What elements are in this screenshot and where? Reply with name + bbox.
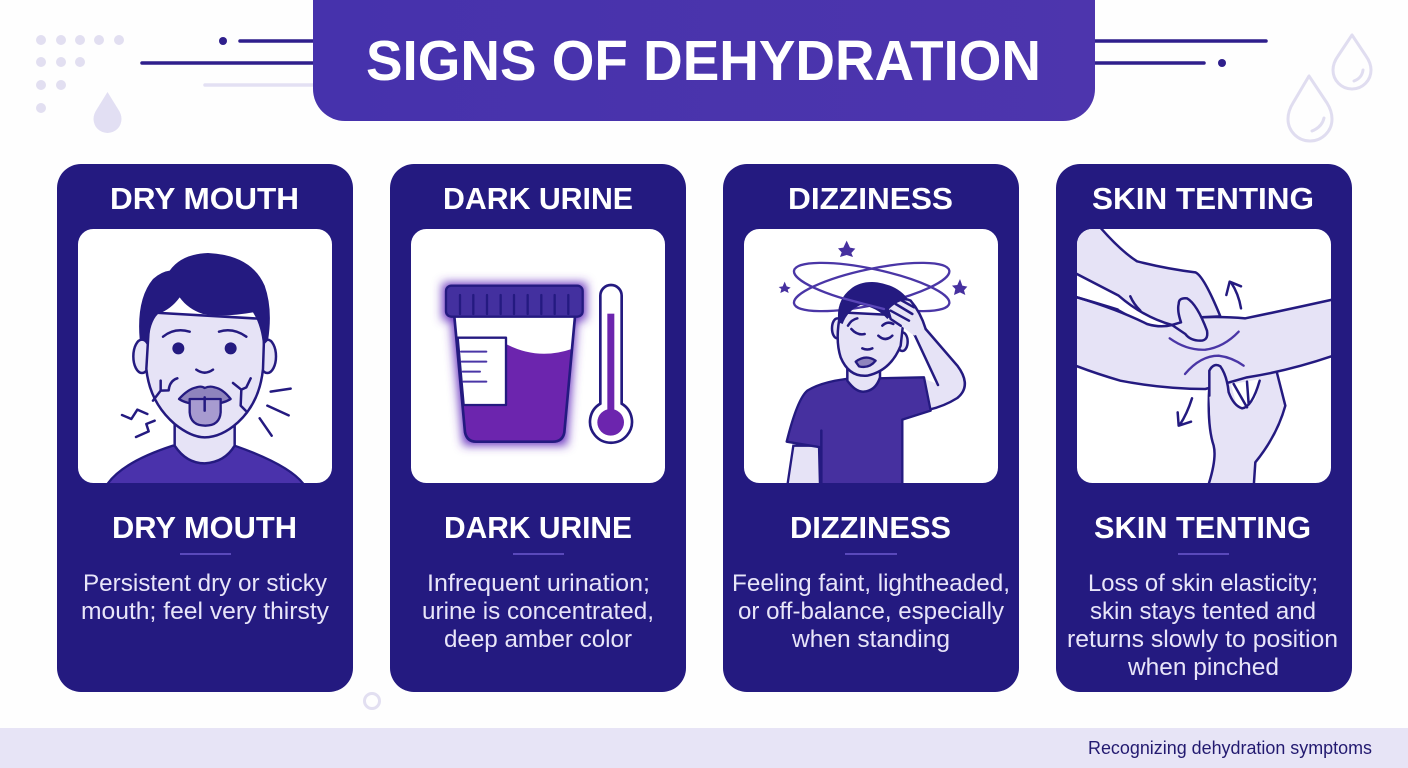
heading: dark urine: DARK URINE — [443, 181, 633, 216]
description: dizziness — [732, 570, 1010, 653]
icon: filled water drop, top left — [94, 92, 122, 133]
label: dark urine: DARK URINE — [444, 510, 632, 545]
decoration: lines left of title — [142, 37, 315, 85]
title banner — [313, 0, 1095, 121]
description: skin tenting: when pinched — [1127, 654, 1279, 681]
description: dizziness: or off-balance, especially — [738, 598, 1004, 625]
decoration: small ring — [364, 694, 380, 708]
description: skin tenting: returns slowly to position — [1067, 626, 1338, 653]
description: skin tenting: skin stays tented and — [1090, 598, 1316, 625]
description: dry mouth — [81, 570, 329, 625]
label: dizziness: DIZZINESS — [790, 510, 951, 545]
description: dark urine — [422, 570, 654, 653]
title: SIGNS OF DEHYDRATION — [366, 29, 1041, 93]
divider — [1178, 553, 1229, 555]
label: dry mouth: DRY MOUTH — [112, 510, 297, 545]
heading: dry mouth: DRY MOUTH — [110, 181, 299, 216]
description: dizziness: Feeling faint, lightheaded, — [732, 570, 1010, 597]
description: skin tenting — [1067, 570, 1338, 681]
divider — [180, 553, 231, 555]
heading: dizziness: DIZZINESS — [788, 181, 953, 216]
footer band — [0, 728, 1408, 768]
description: dark urine: deep amber color — [444, 626, 632, 653]
panel: skin tenting — [1056, 164, 1352, 692]
panel: dark urine — [390, 164, 686, 692]
illustration: face with dry mouth — [78, 229, 332, 486]
description: dizziness: when standing — [791, 626, 950, 653]
footer caption: Recognizing dehydration symptoms — [1088, 738, 1372, 758]
icon: outlined water drops, top right — [1288, 35, 1371, 141]
decoration: lines right of title — [1093, 41, 1266, 67]
description: dark urine: Infrequent urination; — [427, 570, 650, 597]
illustration: urine cup and thermometer — [411, 229, 665, 483]
description: dark urine: urine is concentrated, — [422, 598, 654, 625]
illustration: dizzy person holding head — [744, 229, 998, 486]
description: dry mouth: mouth; feel very thirsty — [81, 598, 329, 625]
divider — [513, 553, 564, 555]
divider — [845, 553, 897, 555]
panel: dizziness — [723, 164, 1019, 692]
heading: skin tenting: SKIN TENTING — [1092, 181, 1314, 216]
description: skin tenting: Loss of skin elasticity; — [1088, 570, 1318, 597]
label: skin tenting: SKIN TENTING — [1094, 510, 1311, 545]
illustration: hands pinching skin — [1074, 226, 1335, 487]
decoration: dot grid, top left — [36, 35, 124, 113]
panel: dry mouth — [57, 164, 353, 692]
description: dry mouth: Persistent dry or sticky — [83, 570, 327, 597]
